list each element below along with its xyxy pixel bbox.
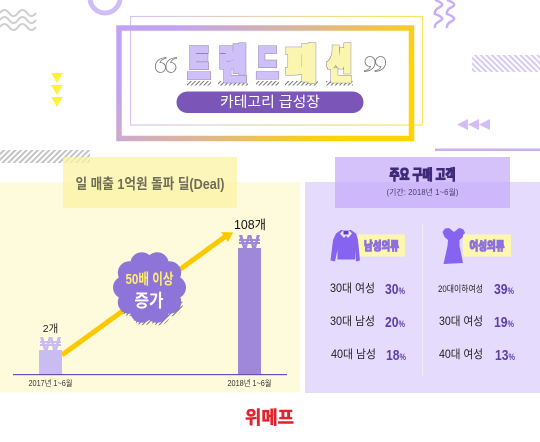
men's row: 30s men: 30대 남성 xyxy=(330,315,375,328)
decoration: yellow triangles xyxy=(51,73,63,107)
cloud callout: 증가 xyxy=(134,291,164,311)
column divider xyxy=(422,224,423,376)
tag: women's clothing xyxy=(463,234,511,256)
men's row: 40s men xyxy=(331,347,406,364)
men's row: 30s women: 30대 여성 xyxy=(330,282,375,295)
heading box: sales xyxy=(63,157,237,208)
icon: shirt xyxy=(330,230,360,262)
women's row: 40s women: 40대 여성 xyxy=(439,348,483,361)
decoration: grey hatch xyxy=(0,150,90,163)
women's row: 30s women xyxy=(439,314,514,331)
bar: 2018: ₩ xyxy=(239,232,260,252)
women's row: 30s women: 30대 여성 xyxy=(439,315,483,328)
cloud body xyxy=(113,252,186,323)
heading box: customers xyxy=(335,157,510,208)
decoration: purple line xyxy=(435,148,540,151)
tag: men's clothing xyxy=(358,234,405,256)
men's row: 30s women: 30% xyxy=(385,281,405,298)
cloud callout xyxy=(113,252,186,325)
title: 트 xyxy=(188,43,210,87)
heading box: sales: 일 매출 1억원 돌파 딜(Deal) xyxy=(76,176,225,193)
heading box: customers: (기간: 2018년 1~6월) xyxy=(386,187,459,197)
icon: dress xyxy=(442,228,465,264)
men's row: 30s men: 20% xyxy=(385,314,405,331)
title xyxy=(187,43,353,87)
title frame: thick gradient xyxy=(119,28,412,138)
panel: daily sales chart xyxy=(0,157,300,392)
bar: 2018: 108개 xyxy=(234,218,266,232)
subtitle pill: 카테고리 급성장 xyxy=(220,94,320,111)
logo: wemakeprice: 위메프 xyxy=(245,408,294,428)
tag: women's clothing: 여성의류 xyxy=(470,239,504,253)
subtitle pill xyxy=(176,92,364,113)
heading box: customers: 주요 구매 고객 xyxy=(390,167,456,184)
women's row: 20s and under xyxy=(438,281,514,298)
women's row: 30s women: 19% xyxy=(494,314,514,331)
axis line xyxy=(13,374,287,375)
title shadow hatch xyxy=(187,81,353,86)
men's row: 30s women xyxy=(330,281,405,298)
title frame: thin xyxy=(130,16,422,125)
women's row: 40s women xyxy=(439,347,515,364)
tag: men's clothing: 남성의류 xyxy=(364,239,399,253)
cloud callout: 50배 이상 xyxy=(126,271,174,288)
bar: 2017: 2개 xyxy=(43,323,58,335)
bar: 2017 xyxy=(39,323,62,374)
title: 패 xyxy=(286,43,317,87)
cloud shadow xyxy=(119,293,183,325)
title: 렌 xyxy=(219,43,247,87)
decoration: purple left triangles xyxy=(457,119,490,130)
women's row: 20s and under: 20대이하여성 xyxy=(438,283,483,294)
women's row: 40s women: 13% xyxy=(495,347,515,364)
decoration: grey waves xyxy=(0,10,36,30)
icon: closing quote xyxy=(364,57,386,72)
axis label: 2018: 2018년 1~6월 xyxy=(228,378,272,388)
title: 드 xyxy=(257,43,278,87)
decoration: purple hatch xyxy=(472,55,540,72)
decoration: purple waves xyxy=(435,0,454,28)
axis label: 2017: 2017년 1~6월 xyxy=(28,378,72,388)
men's row: 40s men: 18% xyxy=(386,347,406,364)
men's row: 30s men xyxy=(330,314,405,331)
bar: 2017: ₩ xyxy=(40,334,61,354)
title: 션 xyxy=(327,43,352,87)
panel: main customers xyxy=(305,157,540,393)
women's row: 20s and under: 39% xyxy=(494,281,514,298)
men's row: 40s men: 40대 남성 xyxy=(331,348,376,361)
growth arrow xyxy=(62,232,233,355)
bar: 2018 xyxy=(234,218,266,374)
icon: opening quote xyxy=(155,58,176,72)
decoration: purple ring xyxy=(90,0,120,13)
